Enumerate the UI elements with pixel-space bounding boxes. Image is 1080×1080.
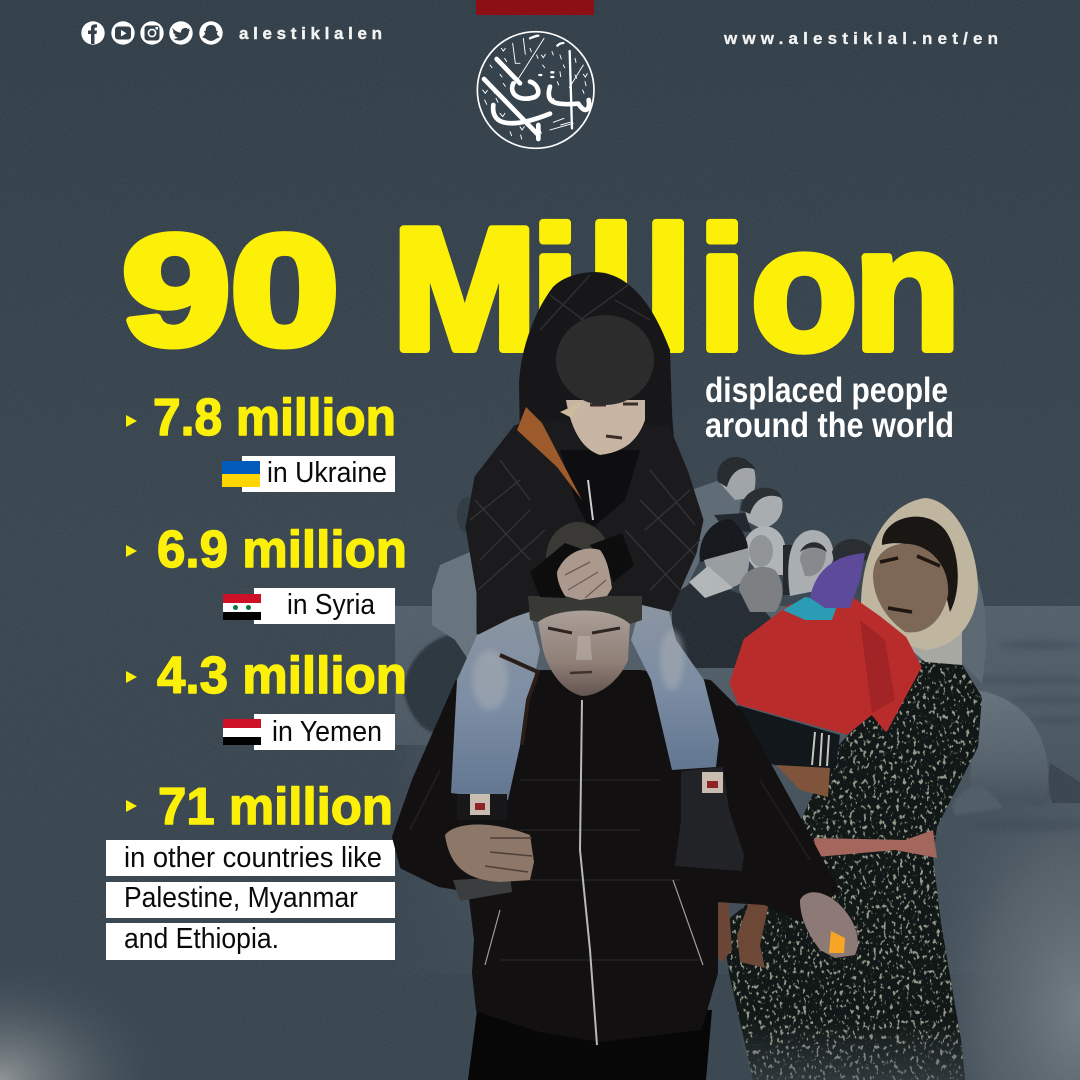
child foot two — [737, 898, 770, 968]
woman shawl back — [960, 570, 986, 684]
left glove — [530, 543, 590, 598]
orange collar — [517, 407, 582, 500]
flag: Ukraine — [222, 461, 260, 487]
hugging head — [739, 567, 782, 612]
label box line one — [106, 840, 395, 876]
crowd back jacket — [672, 480, 741, 600]
value: 4.3 million — [157, 647, 407, 705]
icon: youtube — [111, 21, 135, 45]
value: 7.8 million — [153, 389, 396, 447]
right boot red mark — [707, 781, 718, 788]
left hand — [445, 824, 534, 882]
cyan scarf — [783, 597, 838, 620]
social handle: alestiklalen — [239, 24, 382, 43]
value: 71 million — [158, 778, 393, 836]
boat dark stern — [1049, 763, 1080, 803]
finger lines — [565, 562, 606, 598]
left sole — [453, 877, 512, 901]
dark figure between — [783, 545, 796, 595]
hijab woman one — [742, 526, 785, 575]
label lines: in other countries like — [124, 842, 382, 874]
purple scarf — [810, 553, 865, 608]
left jeans leg — [451, 612, 540, 800]
photo: man's body — [394, 603, 858, 1080]
photo: child on shoulders — [467, 272, 702, 633]
value: 6.9 million — [157, 521, 407, 579]
brows and eyes — [548, 628, 620, 633]
boat hull — [970, 690, 1048, 807]
social icons row — [81, 21, 223, 45]
label: in Yemen — [272, 716, 382, 748]
pockets — [485, 880, 703, 965]
icon: twitter — [169, 21, 193, 45]
bullet — [126, 415, 137, 427]
label box — [254, 714, 395, 750]
label box line three — [106, 923, 395, 960]
headscarf — [861, 498, 978, 650]
face — [566, 400, 645, 455]
face — [538, 611, 630, 696]
sea ripples — [970, 640, 1080, 832]
nose highlight — [576, 636, 592, 660]
label: in Ukraine — [267, 457, 387, 489]
right boot — [676, 768, 743, 870]
child foot — [776, 765, 830, 797]
boat hull lower — [953, 787, 1003, 815]
right glove — [590, 533, 634, 582]
left boot label — [470, 794, 490, 815]
boat left dark shape — [403, 633, 470, 734]
hood quilting — [540, 275, 650, 340]
photo: child's hands and gloves — [530, 533, 634, 600]
dark coat — [672, 578, 795, 668]
right jeans leg — [631, 603, 719, 770]
bullet — [126, 800, 137, 812]
label lines — [124, 842, 382, 955]
right hand — [800, 892, 858, 958]
label box — [242, 456, 395, 492]
child legs on hip — [737, 705, 840, 770]
far dark head — [832, 539, 872, 565]
subheading: displaced people around the world: around the world — [705, 406, 954, 445]
headline: 90 Million: 90 — [122, 204, 339, 378]
braid — [500, 655, 538, 745]
hijab woman two — [788, 530, 833, 596]
blonde hair — [560, 402, 582, 418]
orange whistle — [829, 931, 845, 953]
eyes and mouth — [880, 556, 940, 612]
icon: facebook — [81, 21, 105, 45]
left boot — [457, 794, 507, 820]
flag: Yemen — [223, 719, 261, 745]
trousers — [468, 1003, 712, 1080]
jacket highlights — [410, 770, 810, 960]
left boot red mark — [475, 803, 485, 810]
face — [873, 544, 948, 632]
white under-scarf — [900, 625, 962, 665]
mouth — [570, 672, 592, 673]
label: in Syria — [287, 589, 376, 621]
stat: other countries — [106, 778, 395, 960]
belt — [814, 830, 937, 858]
left background person — [432, 552, 482, 680]
label box line two — [106, 882, 395, 918]
top red tab — [476, 0, 594, 15]
website url: www.alestiklal.net/en — [723, 29, 998, 48]
headline: 90 Million — [122, 191, 960, 386]
beanie person — [689, 519, 749, 598]
zip pull — [588, 480, 593, 520]
icon: instagram — [140, 21, 164, 45]
hat band — [528, 596, 642, 624]
man one head — [717, 457, 756, 500]
hat dome — [546, 522, 610, 594]
bullet — [126, 545, 137, 557]
logo: calligraphic seal — [477, 32, 594, 148]
child foot one — [708, 892, 732, 962]
headline: 90 Million: Million — [392, 191, 960, 386]
label lines: Palestine, Myanmar — [124, 882, 358, 914]
hands — [557, 548, 612, 600]
right boot label — [702, 772, 723, 793]
inner shirt — [560, 450, 640, 530]
stat: Ukraine — [126, 389, 396, 492]
man two head — [714, 488, 783, 532]
jeans highlight — [472, 630, 684, 710]
dress bottom haze — [735, 1020, 965, 1080]
flag: Syria — [223, 594, 261, 620]
tracksuit stripes — [812, 732, 829, 766]
dress — [722, 660, 982, 1080]
eyes and mouth — [590, 404, 638, 438]
bullet — [126, 671, 137, 683]
man's jacket — [394, 672, 837, 1040]
icon: snapchat — [199, 21, 223, 45]
finger lines — [485, 838, 532, 872]
label lines: and Ethiopia. — [124, 923, 279, 955]
hair — [882, 517, 958, 612]
background crowd and boat — [403, 457, 1080, 815]
jacket quilting — [470, 460, 700, 590]
subheading: displaced people around the world: displaced people — [705, 371, 948, 410]
jacket — [467, 420, 702, 633]
label box — [254, 588, 395, 624]
beanie — [556, 315, 654, 405]
left background person head — [457, 497, 477, 533]
stat: Syria — [126, 521, 407, 624]
red shading — [860, 620, 895, 713]
photo: man's head and hat — [528, 522, 642, 696]
red top — [731, 597, 920, 733]
hood — [519, 272, 674, 440]
stat: Yemen — [126, 647, 407, 750]
subheading: displaced people around the world — [705, 371, 954, 445]
zipper — [580, 700, 597, 1045]
photo: woman carrying child — [708, 498, 982, 1080]
